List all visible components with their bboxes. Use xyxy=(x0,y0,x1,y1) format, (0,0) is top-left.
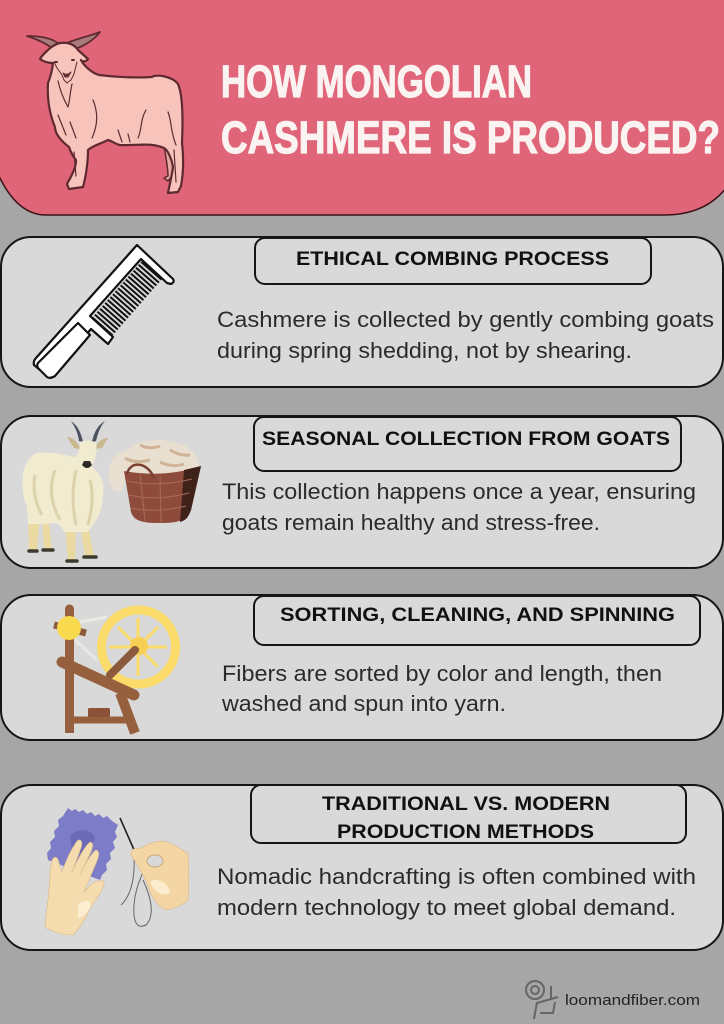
panel: seasonal collection xyxy=(1,416,723,568)
title: HOW MONGOLIAN xyxy=(221,56,532,107)
header banner xyxy=(0,0,724,215)
icon: basket of wool xyxy=(109,440,201,523)
heading: seasonal collection xyxy=(254,417,681,471)
icon: small spinning wheel xyxy=(526,981,558,1019)
website: loomandfiber.com xyxy=(565,993,700,1009)
text: seasonal collection xyxy=(222,479,696,535)
heading: seasonal collection: SEASONAL COLLECTION FROM GOATS xyxy=(262,429,670,450)
heading: traditional vs modern: TRADITIONAL VS. MODERN xyxy=(322,794,610,815)
footer logo xyxy=(526,981,700,1019)
heading: sorting and spinning: SORTING, CLEANING, AND SPINNING xyxy=(280,605,675,626)
heading: traditional vs modern xyxy=(251,785,686,843)
heading: sorting and spinning xyxy=(254,596,700,645)
text: ethical combing xyxy=(217,307,714,363)
text: ethical combing: during spring shedding, not by shearing. xyxy=(217,338,632,363)
icon: white goat xyxy=(22,421,108,561)
heading: traditional vs modern: PRODUCTION METHODS xyxy=(337,822,594,843)
icon: hands sewing fabric xyxy=(45,808,189,935)
text: ethical combing: Cashmere is collected by gently combing goats xyxy=(217,307,714,332)
title xyxy=(221,56,720,163)
text: seasonal collection: This collection happens once a year, ensuring xyxy=(222,479,696,504)
text: sorting and spinning: Fibers are sorted by color and length, then xyxy=(222,661,662,686)
text: seasonal collection: goats remain healthy and stress-free. xyxy=(222,510,600,535)
heading: ethical combing: ETHICAL COMBING PROCESS xyxy=(296,249,609,270)
text: sorting and spinning xyxy=(221,661,662,716)
panel: traditional vs modern xyxy=(1,785,723,950)
icon: pink goat xyxy=(27,32,183,193)
text: traditional vs modern: Nomadic handcrafting is often combined with xyxy=(217,864,696,889)
icon: comb xyxy=(34,245,174,378)
icon: spinning wheel xyxy=(54,604,176,733)
panel: ethical combing xyxy=(1,237,723,387)
text: traditional vs modern: modern technology to meet global demand. xyxy=(217,895,676,920)
text: sorting and spinning: washed and spun into yarn. xyxy=(221,691,506,716)
heading: ethical combing xyxy=(255,238,651,284)
text: traditional vs modern xyxy=(217,864,696,920)
panel: sorting and spinning xyxy=(1,595,723,740)
